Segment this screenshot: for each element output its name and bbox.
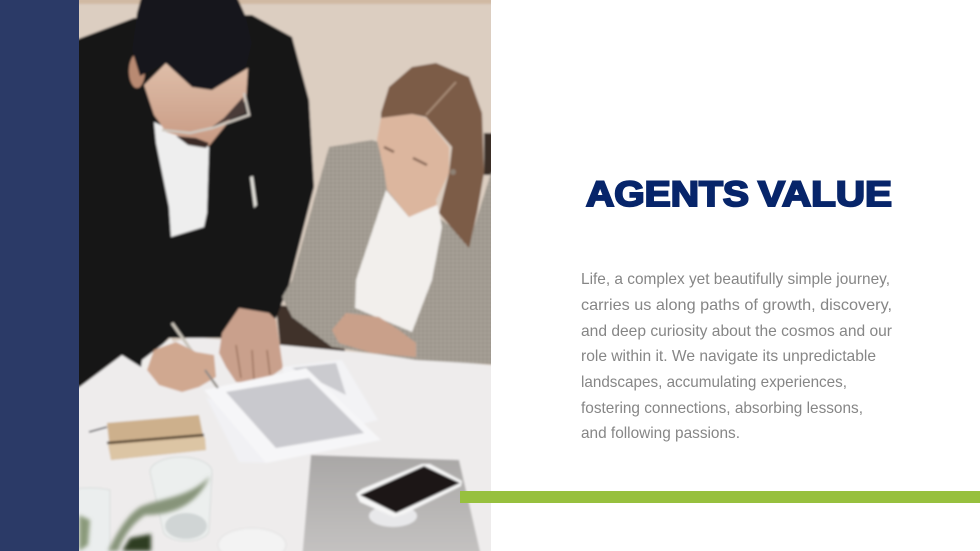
woman figure: [282, 63, 500, 365]
phone screen: [360, 466, 460, 513]
drinking glasses: [70, 457, 286, 551]
body paragraph: fostering connections, absorbing lessons,: [581, 400, 863, 417]
desk: [70, 337, 500, 551]
woman hair: [381, 63, 484, 248]
man hands: [141, 308, 283, 392]
body paragraph: and following passions.: [581, 425, 740, 442]
man ear: [129, 54, 145, 88]
body paragraph: and deep curiosity about the cosmos and our: [581, 323, 893, 340]
body paragraph: [581, 271, 893, 442]
glass one: [150, 457, 212, 541]
laptop: [302, 455, 482, 551]
plant leaves: [79, 476, 210, 551]
photo scene: [70, 0, 500, 551]
left leaf: [79, 515, 90, 551]
notebook cover: [107, 415, 206, 460]
man moustache: [176, 136, 209, 148]
dark leaf: [122, 534, 151, 551]
main leaf: [108, 476, 210, 551]
printed text block: [226, 378, 364, 448]
man shirt cuff: [141, 338, 173, 370]
title: [586, 174, 892, 214]
title word two: VALUE: [758, 174, 892, 214]
notebook elastic: [107, 435, 204, 443]
body paragraph: landscapes, accumulating experiences,: [581, 374, 847, 391]
man figure: [70, 0, 314, 394]
woman blazer: [282, 140, 500, 365]
man suit: [70, 15, 314, 394]
glass three: [218, 528, 286, 551]
woman blouse: [355, 190, 442, 332]
man face: [144, 63, 248, 146]
phone stand: [369, 505, 417, 527]
glass one base: [165, 513, 207, 539]
man glasses: [162, 93, 249, 133]
title word one: AGENTS: [586, 174, 749, 214]
wall: [79, 3, 491, 366]
phone case: [356, 464, 462, 517]
man shirt: [154, 122, 209, 237]
chair back: [482, 132, 491, 176]
woman earring: [450, 169, 456, 175]
pen: [172, 323, 217, 387]
pocket square: [250, 176, 257, 208]
man hair: [132, 0, 246, 77]
woman hands: [332, 313, 416, 357]
phone: [356, 464, 462, 527]
man right hand: [219, 308, 283, 383]
notebook lower strip: [108, 437, 206, 460]
woman hair parting: [426, 82, 456, 115]
body paragraph: carries us along paths of growth, discovery,: [581, 297, 892, 314]
front page: [204, 368, 381, 463]
documents: [204, 360, 381, 463]
back page: [281, 362, 375, 422]
man right hand finger gaps: [236, 345, 270, 380]
wooden floor behind arms: [276, 305, 345, 352]
body paragraph: role within it. We navigate its unpredictable: [581, 348, 876, 365]
man glasses lens: [212, 97, 246, 127]
glass two: [70, 488, 110, 551]
notebook: [89, 415, 206, 460]
pen tip over the page: [205, 370, 218, 388]
photo: two agents reviewing a document at a desk: [70, 0, 500, 551]
left navy sidebar: [0, 0, 79, 551]
notebook string: [89, 427, 107, 432]
body paragraph: Life, a complex yet beautifully simple journey,: [581, 271, 890, 288]
woman eyes: [384, 147, 427, 165]
man left hand: [147, 342, 216, 392]
back page text: [292, 363, 346, 395]
under page: [206, 397, 300, 463]
green accent bar: [460, 491, 980, 503]
woman face and neck: [377, 114, 449, 217]
wall top band: [70, 0, 500, 4]
